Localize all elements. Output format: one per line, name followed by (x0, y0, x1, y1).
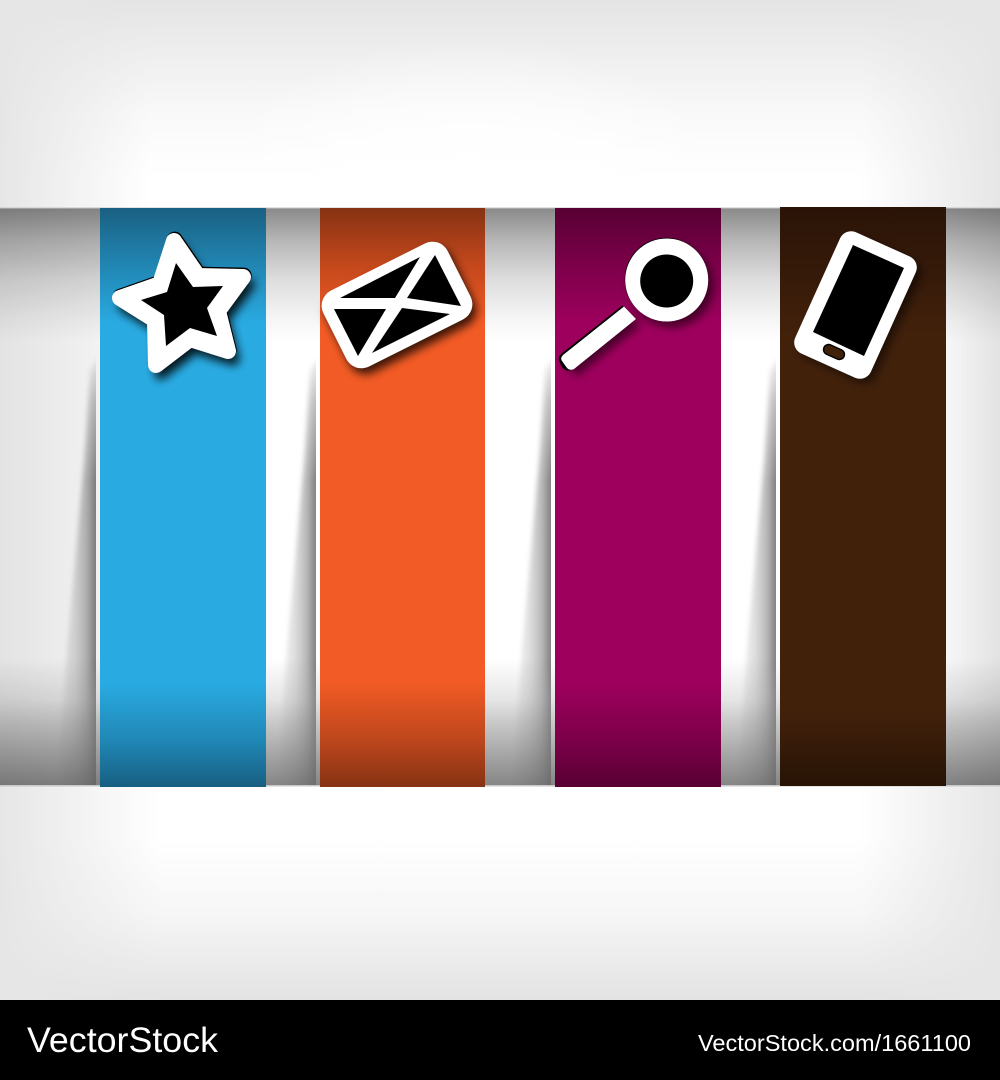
background: bottom panel (0, 786, 1000, 1000)
footer logo: VectorStock: VectorStock (27, 1021, 219, 1060)
footer image id: VectorStock.com/1661100 (698, 1030, 971, 1056)
icon: star (120, 240, 248, 373)
central shaded band (0, 208, 1000, 790)
icon: magnifying glass (559, 238, 713, 376)
icon: smartphone (790, 227, 926, 388)
icon: envelope (316, 236, 482, 380)
background: top panel (0, 0, 1000, 208)
panel: purple strip (555, 208, 721, 787)
panel: blue strip (100, 208, 266, 787)
panel: orange strip (320, 208, 485, 787)
panel: brown strip (780, 207, 946, 786)
footer bar (0, 1000, 1000, 1080)
